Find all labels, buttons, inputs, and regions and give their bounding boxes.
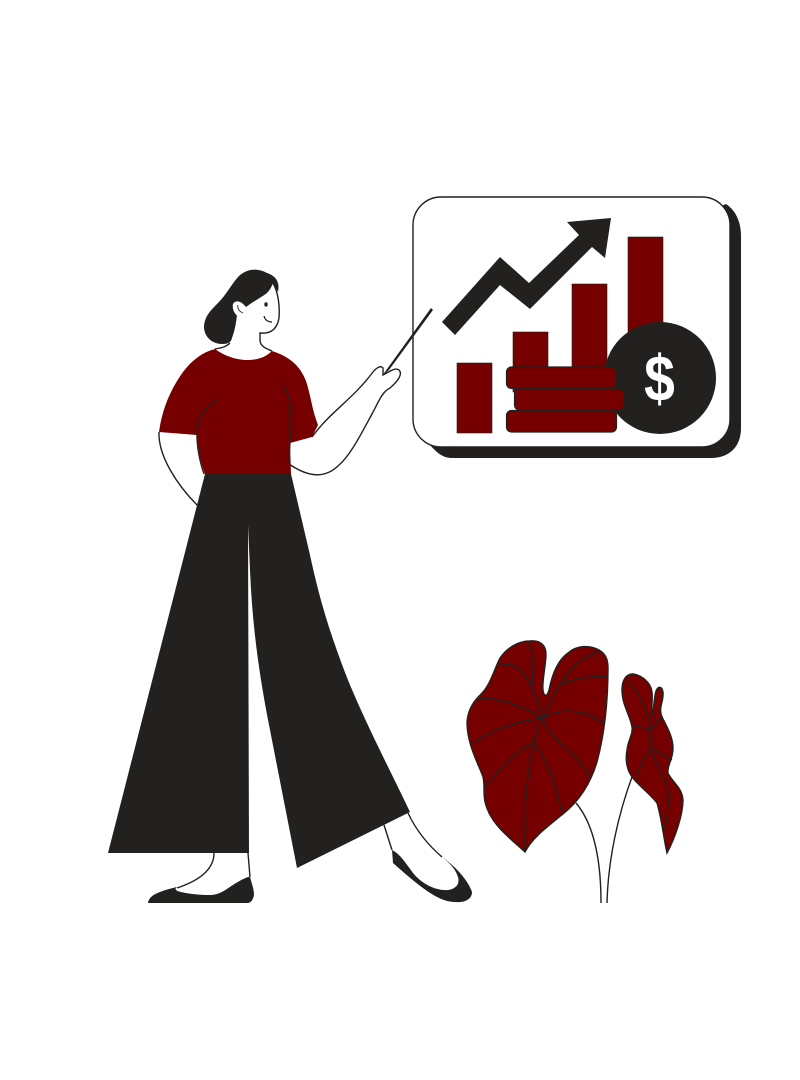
figure: woman presenting	[108, 270, 472, 903]
eye	[264, 302, 268, 307]
ear detail	[238, 305, 243, 313]
back arm	[159, 432, 198, 506]
leaf veins	[473, 641, 607, 852]
trousers	[108, 474, 410, 868]
bar chart	[457, 237, 663, 433]
icon: dollar coin	[604, 322, 716, 434]
small leaf	[622, 674, 683, 853]
plant	[467, 641, 683, 903]
neck and face	[215, 283, 279, 365]
ear	[233, 301, 246, 316]
icon: dollar coin: $	[644, 342, 675, 414]
large leaf	[467, 641, 608, 852]
small leaf veins	[627, 681, 672, 830]
mouth	[264, 316, 272, 322]
shirt fold lines	[197, 386, 291, 474]
right foot	[384, 813, 472, 902]
panel: chart board	[413, 197, 741, 458]
stems	[576, 777, 632, 903]
icon: coin stack	[506, 367, 624, 432]
face and neck outline	[215, 283, 279, 351]
hair	[204, 270, 279, 344]
left foot	[148, 853, 254, 903]
pointer arm fill	[289, 367, 400, 475]
icon: trend arrow	[442, 218, 611, 335]
shirt	[159, 349, 318, 474]
pointer stick	[382, 308, 433, 376]
pointer arm outline	[289, 367, 400, 475]
